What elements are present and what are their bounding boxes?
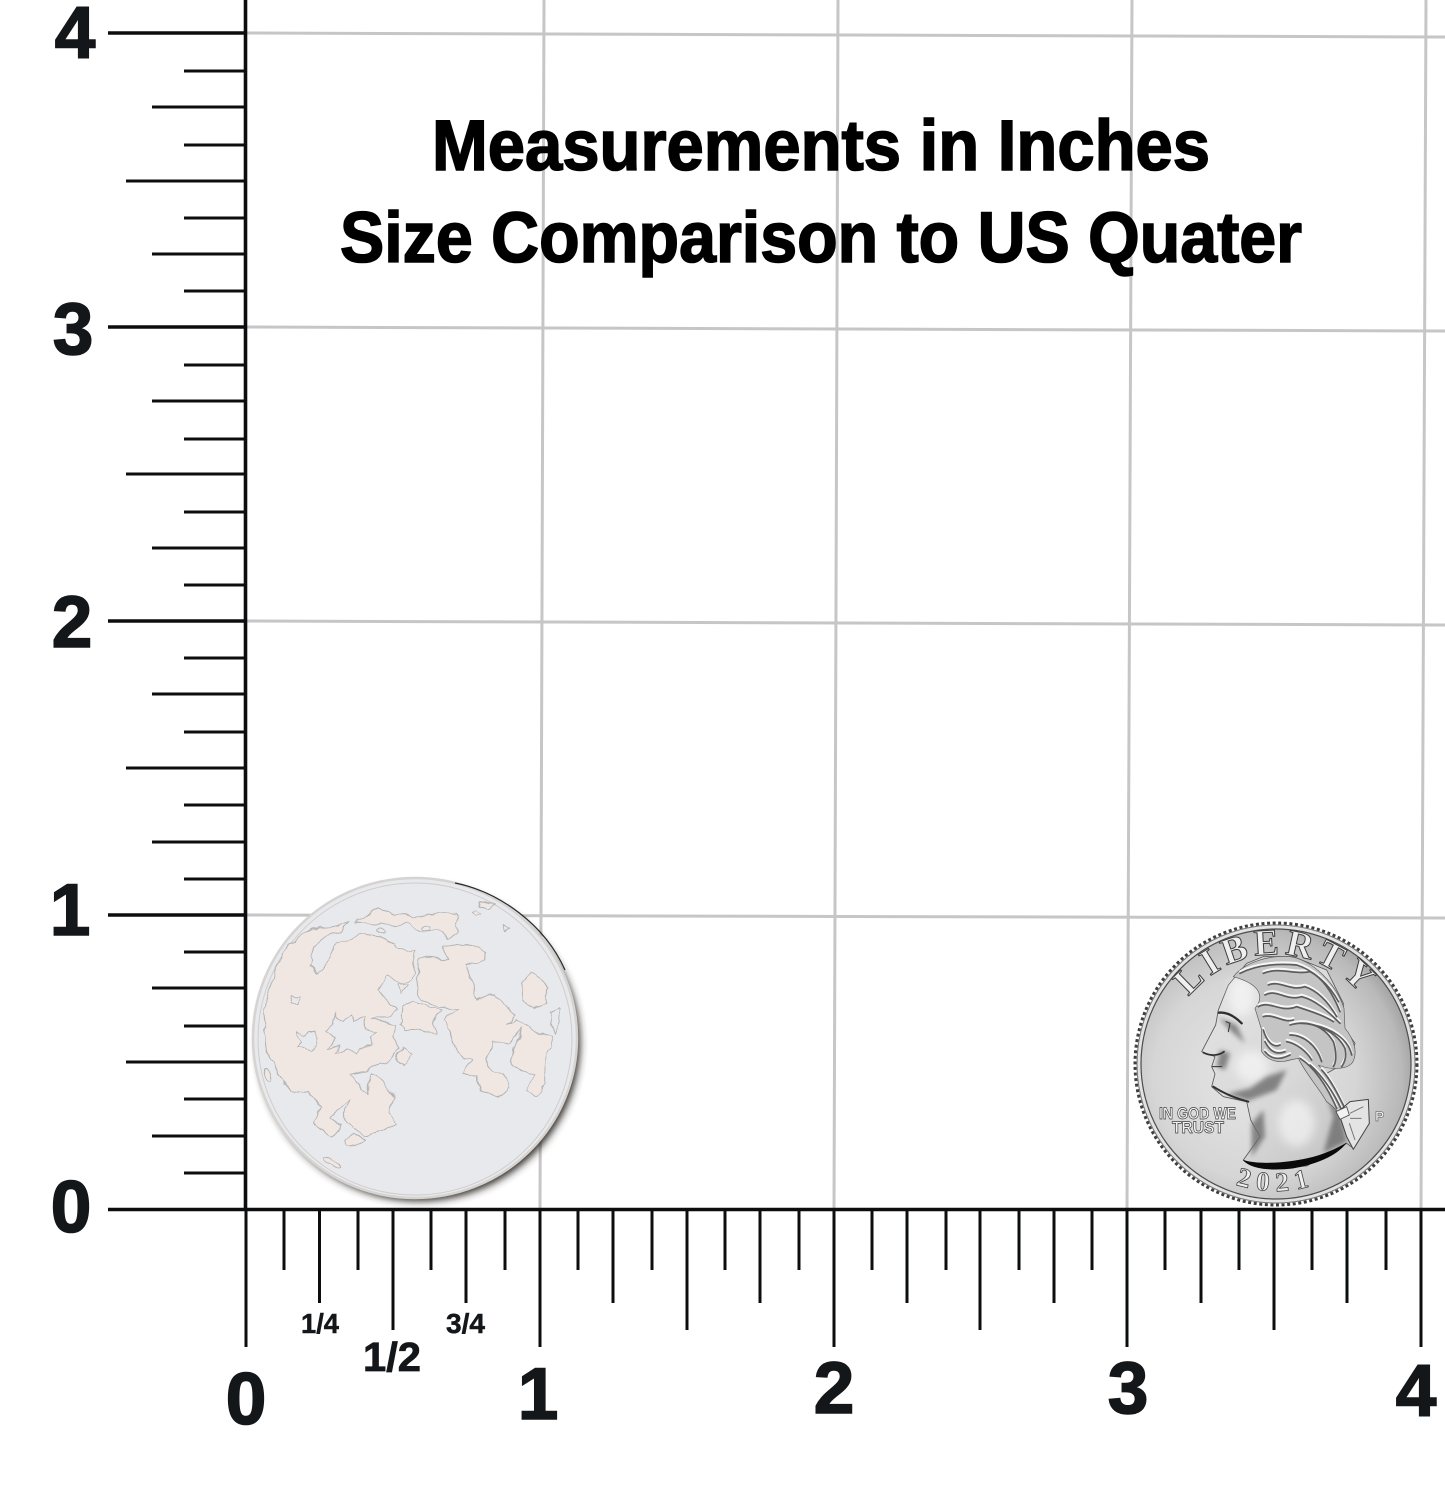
vertical ruler labels: [50, 0, 96, 1248]
bust: [1202, 957, 1368, 1168]
horizontal ruler labels: 1/2: [363, 1334, 421, 1380]
vertical ruler labels: 1: [50, 870, 90, 951]
horizontal ruler labels: 1/4: [301, 1308, 339, 1339]
LIBERTY: LIBERTY: [1171, 930, 1377, 997]
vertical ruler labels: 3: [53, 289, 93, 370]
moon inner rim: [258, 883, 572, 1195]
ribbon: [1338, 1099, 1369, 1149]
vertical ruler: [108, 0, 246, 1211]
horizontal ruler labels: 2: [814, 1348, 854, 1429]
horizontal ruler labels: 4: [1396, 1351, 1437, 1432]
US quarter coin: [1134, 922, 1418, 1206]
title: Size Comparison to US Quater: [340, 199, 1302, 278]
year 2021: 2021: [1236, 1168, 1309, 1192]
vertical ruler labels: 2: [52, 582, 92, 663]
face and neck shading: [1217, 1017, 1347, 1157]
horizontal ruler labels: 1: [518, 1354, 558, 1435]
coin field: [1141, 929, 1411, 1199]
reeded edge: [1135, 923, 1417, 1205]
moon pin: [253, 878, 580, 1201]
title: Measurements in Inches: [432, 107, 1210, 186]
ribbon knot: [1336, 1107, 1349, 1119]
moon dark rim highlight: [455, 883, 565, 970]
ribbon folds: [1349, 1107, 1363, 1140]
In God We Trust: [1159, 1104, 1236, 1137]
horizontal ruler labels: 0: [226, 1359, 266, 1440]
In God We Trust: TRUST: [1172, 1118, 1225, 1137]
brow, eye and mouth: [1203, 1013, 1248, 1102]
In God We Trust: IN GOD WE: [1159, 1104, 1236, 1123]
coin rim: [1137, 925, 1415, 1203]
hair: [1233, 956, 1355, 1119]
horizontal ruler: [108, 1209, 1445, 1347]
moon shadow: [258, 885, 580, 1201]
grid lines: [246, 0, 1445, 1209]
vertical ruler labels: 0: [51, 1167, 91, 1248]
moon disc: [253, 878, 577, 1198]
face highlights: [1229, 977, 1315, 1147]
horizontal ruler labels: 3/4: [446, 1308, 485, 1339]
Washington portrait: [1202, 956, 1369, 1169]
horizontal ruler labels: [226, 1308, 1437, 1440]
bust shadow: [1243, 1143, 1347, 1169]
moon maria: [264, 900, 562, 1167]
mint mark: P: [1375, 1108, 1384, 1124]
title: [340, 107, 1302, 278]
horizontal ruler labels: 3: [1108, 1348, 1148, 1429]
